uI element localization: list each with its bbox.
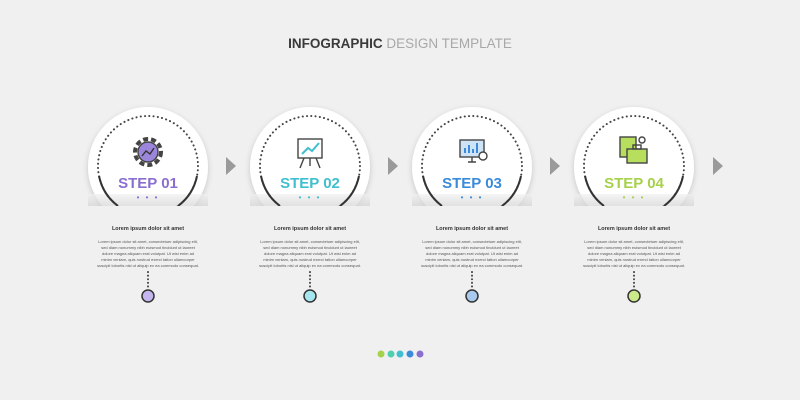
arrow 2 [388,157,398,175]
text block [421,226,523,268]
text block: Lorem ipsum dolor sit amet [436,226,508,232]
text block: suscipit lobortis nisl ut aliquip ex ea commodo consequat. [421,263,523,268]
text block: Lorem ipsum dolor sit amet, consectetuer adipiscing elit, [260,239,360,244]
text block: sed diam nonummy nibh euismod tincidunt ut laoreet [425,245,520,250]
text block [97,226,199,268]
circle card [572,107,696,206]
text block: minim veniam, quis nostrud exerci tation ullamcorper [425,257,519,262]
text block: dolore magna aliquam erat volutpat. Ut wisi enim ad [264,251,356,256]
icon: presentation board [298,139,322,168]
text block: sed diam nonummy nibh euismod tincidunt ut laoreet [263,245,358,250]
text block: Lorem ipsum dolor sit amet, consectetuer adipiscing elit, [98,239,198,244]
step 4 [574,107,694,302]
text block [583,226,685,268]
step 3 [412,107,532,302]
arrow 3 [550,157,560,175]
step 1 [88,107,208,302]
text block: sed diam nonummy nibh euismod tincidunt ut laoreet [101,245,196,250]
text block: suscipit lobortis nisl ut aliquip ex ea commodo consequat. [583,263,685,268]
text block: Lorem ipsum dolor sit amet [274,226,346,232]
step label: STEP 03 [442,175,502,192]
step 2: • • • [299,193,321,202]
circle card [248,107,372,206]
text block: dolore magna aliquam erat volutpat. Ut wisi enim ad [426,251,518,256]
step 3: • • • [461,193,483,202]
step 2 [250,107,370,302]
icon: gear chart [135,139,161,165]
text block: Lorem ipsum dolor sit amet [598,226,670,232]
text block: suscipit lobortis nisl ut aliquip ex ea commodo consequat. [97,263,199,268]
title: INFOGRAPHIC DESIGN TEMPLATE [288,36,512,51]
color dots [378,350,424,358]
text block: Lorem ipsum dolor sit amet [112,226,184,232]
text block: dolore magna aliquam erat volutpat. Ut wisi enim ad [588,251,680,256]
connector [142,272,154,302]
text block: suscipit lobortis nisl ut aliquip ex ea commodo consequat. [259,263,361,268]
text block: minim veniam, quis nostrud exerci tation ullamcorper [263,257,357,262]
icon: monitor chart [460,140,487,162]
text block: Lorem ipsum dolor sit amet, consectetuer adipiscing elit, [422,239,522,244]
connector [628,272,640,302]
step 1: • • • [137,193,159,202]
circle card [410,107,534,206]
text block: Lorem ipsum dolor sit amet, consectetuer adipiscing elit, [584,239,684,244]
text block: dolore magna aliquam erat volutpat. Ut wisi enim ad [102,251,194,256]
step label: STEP 01 [118,175,178,192]
text block [259,226,361,268]
text block: minim veniam, quis nostrud exerci tation ullamcorper [101,257,195,262]
arrow 1 [226,157,236,175]
circle card [86,107,210,206]
step 4: • • • [623,193,645,202]
connector [304,272,316,302]
text block: minim veniam, quis nostrud exerci tation ullamcorper [587,257,681,262]
text block: sed diam nonummy nibh euismod tincidunt ut laoreet [587,245,682,250]
step label: STEP 02 [280,175,340,192]
connector [466,272,478,302]
icon: document briefcase [620,137,647,163]
step label: STEP 04 [604,175,665,192]
arrow 4 [713,157,723,175]
